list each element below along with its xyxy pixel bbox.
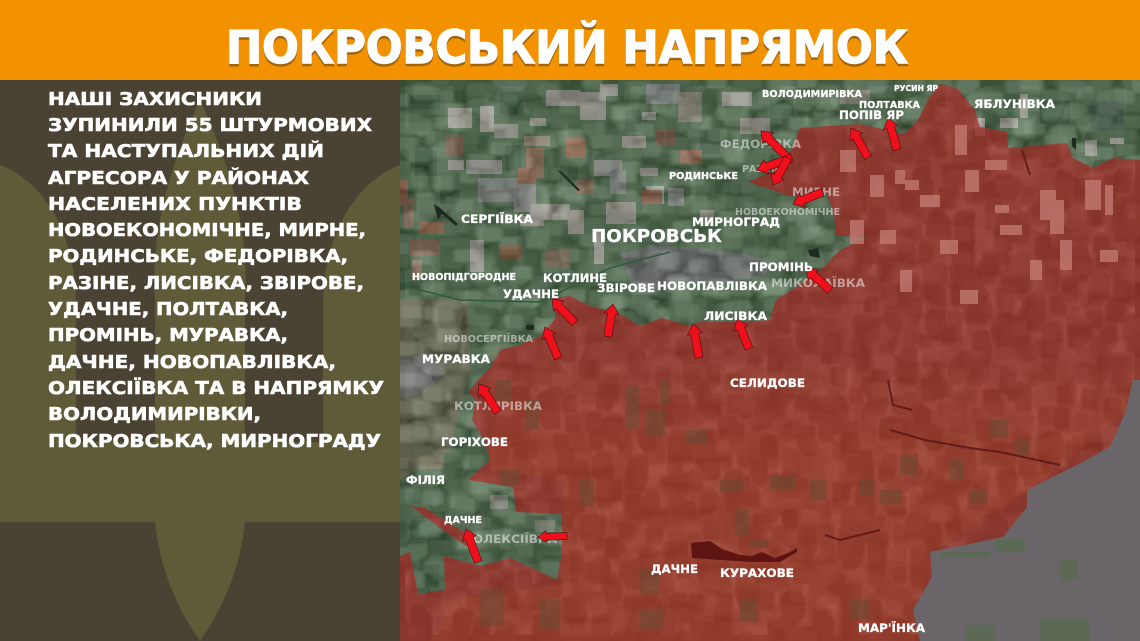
map: field texture xyxy=(400,80,1140,641)
text block: summary: ДАЧНЕ, НОВОПАВЛІВКА, xyxy=(48,352,336,373)
map labels: settlements: КУРАХОВЕ xyxy=(720,566,794,580)
label: Fedorivka: ФЕДОРІВКА xyxy=(720,137,801,151)
map: occupied sliver south-west xyxy=(411,506,470,546)
map: Kurakhove reservoir xyxy=(691,541,797,562)
map labels: settlements: ПРОМІНЬ xyxy=(749,260,813,274)
text block: summary xyxy=(48,89,384,452)
map: tan fields west xyxy=(400,300,470,480)
map: brown and dark green fields xyxy=(410,92,1124,587)
label: Novoekonomichne: НОВОЕКОНОМІЧНЕ xyxy=(735,207,840,218)
label: Novosergiivka: НОВОСЕРГІЇВКА xyxy=(444,331,533,345)
map labels: settlements: РУСИН ЯР xyxy=(894,84,938,93)
map labels: settlements: ГОРІХОВЕ xyxy=(441,435,508,449)
map: light fields xyxy=(400,84,1124,280)
text block: summary: ТА НАСТУПАЛЬНИХ ДІЙ xyxy=(48,140,324,162)
map labels: settlements: НОВОПІДГОРОДНЕ xyxy=(412,272,516,283)
map: occupied territory xyxy=(400,84,1140,641)
text block: summary: НАСЕЛЕНИХ ПУНКТІВ xyxy=(48,194,302,215)
map labels: settlements: ПОЛТАВКА xyxy=(859,100,920,111)
text block: summary: РАЗІНЕ, ЛИСІВКА, ЗВІРОВЕ, xyxy=(48,273,364,294)
map labels: settlements: МИРНОГРАД xyxy=(692,215,780,229)
text block: summary: ВОЛОДИМИРІВКИ, xyxy=(48,404,261,425)
map labels: settlements: ВОЛОДИМИРІВКА xyxy=(762,89,862,100)
text block: summary: АГРЕСОРА У РАЙОНАХ xyxy=(48,167,309,189)
map: dark brown fields south xyxy=(480,380,1029,630)
map: red streams xyxy=(825,150,1060,540)
map: dark water bodies xyxy=(434,138,1076,330)
text block: summary: РОДИНСЬКЕ, ФЕДОРІВКА, xyxy=(48,246,348,267)
map labels: settlements: КОТЛИНЕ xyxy=(543,271,607,285)
map: satellite base xyxy=(400,80,1140,641)
label: Oleksiivka: ОЛЕКСІЇВКА xyxy=(473,531,557,546)
map: grey city fields xyxy=(940,540,1090,641)
text block: summary: ОЛЕКСІЇВКА ТА В НАПРЯМКУ xyxy=(48,377,384,399)
text block: summary: УДАЧНЕ, ПОЛТАВКА, xyxy=(48,299,288,320)
label: Razine: РАЗІНЕ xyxy=(742,164,781,175)
arrows: red attack directions xyxy=(459,116,904,564)
map: Pokrovsk urban area xyxy=(620,246,770,294)
map labels: settlements: СЕЛИДОВЕ xyxy=(730,376,805,390)
map labels: settlements: ПОКРОВСЬК xyxy=(591,226,722,247)
text block: summary: ПОКРОВСЬКА, МИРНОГРАДУ xyxy=(48,431,381,452)
label: Myrne: МИРНЕ xyxy=(792,185,840,199)
text block: summary: НАШІ ЗАХИСНИКИ xyxy=(48,89,262,110)
map: field mottling xyxy=(400,80,1140,641)
map labels: settlements: ЛИСІВКА xyxy=(704,309,767,323)
map labels: settlements: МАР'ЇНКА xyxy=(858,620,925,635)
map labels: settlements xyxy=(406,84,1055,635)
title: ПОКРОВСЬКИЙ НАПРЯМОК xyxy=(226,21,908,74)
map: road xyxy=(400,252,670,302)
left panel background xyxy=(0,80,400,641)
map labels: settlements: МУРАВКА xyxy=(422,352,490,366)
map labels: settlements: РОДИНСЬКЕ xyxy=(669,171,738,182)
map labels: settlements: НОВОПАВЛІВКА xyxy=(657,279,767,293)
map: east grey city xyxy=(913,380,1140,641)
label: Kotliarivka: КОТЛЯРІВКА xyxy=(454,399,542,413)
text block: summary: ПРОМІНЬ, МУРАВКА, xyxy=(48,325,288,346)
map: west settlements xyxy=(400,352,445,398)
map panel xyxy=(400,80,1140,641)
map: pink fields north-east xyxy=(840,125,1118,304)
map labels: settlements: УДАЧНЕ xyxy=(503,287,559,301)
map: orange tint south xyxy=(458,445,1084,641)
icon: trident watermark xyxy=(0,100,400,641)
map labels: settlements: ДАЧНЕ xyxy=(651,562,698,576)
map labels: settlements: ДАЧНЕ xyxy=(444,515,482,526)
text block: summary: ЗУПИНИЛИ 55 ШТУРМОВИХ xyxy=(48,115,372,136)
map labels: settlements: ЯБЛУНІВКА xyxy=(974,97,1055,111)
label: Mykolaivka: МИКОЛАЇВКА xyxy=(771,275,865,290)
title: ПОКРОВСЬКИЙ НАПРЯМОК xyxy=(226,24,908,76)
text block: summary: НОВОЕКОНОМІЧНЕ, МИРНЕ, xyxy=(48,220,366,241)
map labels: settlements: СЕРГІЇВКА xyxy=(461,211,533,226)
map labels: settlements: ПОПІВ ЯР xyxy=(839,108,904,122)
header band xyxy=(0,0,1140,80)
map labels: settlements: ФІЛІЯ xyxy=(406,473,445,487)
map labels: settlements: ЗВІРОВЕ xyxy=(597,281,655,295)
